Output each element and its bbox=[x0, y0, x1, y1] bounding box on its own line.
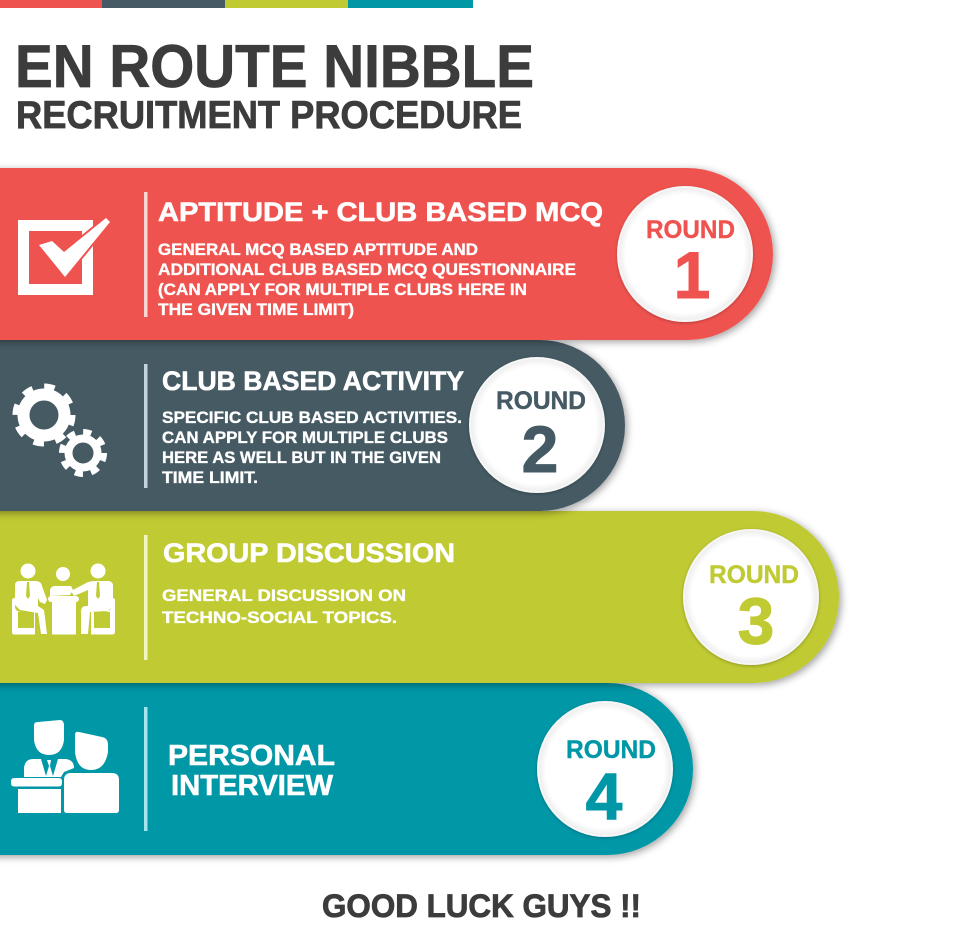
panel: round 3 group discussion bbox=[0, 511, 839, 683]
icon: checkbox bbox=[18, 218, 110, 295]
text: aptitude description: ADDITIONAL CLUB BASED MCQ QUESTIONNAIRE bbox=[158, 260, 576, 279]
heading: personal interview: INTERVIEW bbox=[171, 770, 334, 802]
badge: round 4: 4 bbox=[586, 759, 623, 833]
panel: round 1 aptitude and club based mcq bbox=[0, 168, 773, 340]
text: group discussion description bbox=[162, 586, 406, 627]
heading: aptitude + club based mcq: APTITUDE + CLUB BASED MCQ bbox=[158, 197, 603, 227]
title: RECRUITMENT PROCEDURE bbox=[16, 94, 522, 137]
heading: personal interview bbox=[168, 740, 335, 802]
text: aptitude description: (CAN APPLY FOR MULTIPLE CLUBS HERE IN bbox=[158, 280, 527, 299]
icon: gears bbox=[17, 388, 104, 474]
closing message: GOOD LUCK GUYS !! bbox=[322, 888, 641, 924]
band: round 1 bbox=[0, 168, 773, 340]
badge: round 2 bbox=[470, 358, 604, 492]
badge: round 3: 3 bbox=[738, 584, 774, 658]
badge: round 4: ROUND bbox=[566, 736, 656, 764]
text: aptitude description: THE GIVEN TIME LIMIT) bbox=[158, 300, 354, 319]
panel: round 2 club based activity bbox=[0, 340, 625, 511]
badge: round 1: 1 bbox=[674, 238, 710, 312]
badge: round 3 bbox=[684, 530, 818, 664]
icon: interview bbox=[11, 720, 119, 813]
badge: round 3: ROUND bbox=[709, 561, 799, 589]
icon: group discussion bbox=[12, 564, 115, 634]
divider: round 3 bbox=[144, 535, 148, 660]
badge: round 2: 2 bbox=[522, 412, 558, 486]
divider: round 2 bbox=[144, 364, 148, 488]
text: group discussion description: GENERAL DISCUSSION ON bbox=[162, 586, 406, 605]
top colour bar bbox=[0, 0, 473, 8]
text: aptitude description: GENERAL MCQ BASED APTITUDE AND bbox=[158, 240, 478, 259]
text: club based activity description: SPECIFIC CLUB BASED ACTIVITIES. bbox=[162, 408, 462, 427]
band: round 4 bbox=[0, 683, 693, 855]
badge: round 4 bbox=[538, 702, 672, 836]
band: round 3 bbox=[0, 511, 839, 683]
heading: club based activity: CLUB BASED ACTIVITY bbox=[162, 366, 464, 396]
text: club based activity description: CAN APPLY FOR MULTIPLE CLUBS bbox=[162, 428, 448, 447]
title: EN ROUTE NIBBLE bbox=[15, 33, 534, 100]
text: aptitude description bbox=[158, 240, 576, 319]
badge: round 1 bbox=[618, 187, 752, 321]
badge: round 2: ROUND bbox=[496, 387, 586, 415]
band: round 2 bbox=[0, 340, 625, 511]
text: club based activity description: TIME LIMIT. bbox=[162, 468, 258, 487]
panel: round 4 personal interview bbox=[0, 683, 693, 855]
divider: round 4 bbox=[144, 707, 148, 831]
divider: round 1 bbox=[144, 192, 148, 317]
heading: personal interview: PERSONAL bbox=[168, 740, 335, 772]
text: club based activity description bbox=[162, 408, 462, 487]
text: group discussion description: TECHNO-SOCIAL TOPICS. bbox=[162, 608, 397, 627]
badge: round 1: ROUND bbox=[646, 216, 735, 244]
title bbox=[15, 33, 534, 137]
text: club based activity description: HERE AS WELL BUT IN THE GIVEN bbox=[162, 448, 441, 467]
heading: group discussion: GROUP DISCUSSION bbox=[163, 538, 455, 568]
